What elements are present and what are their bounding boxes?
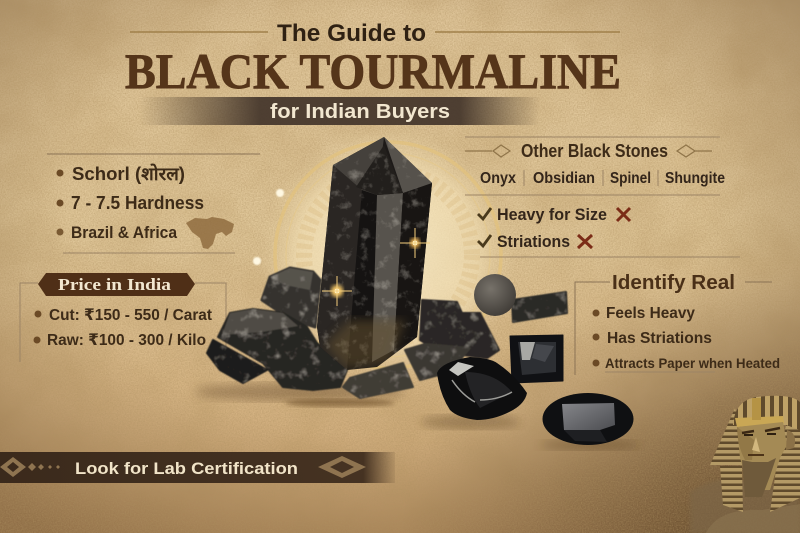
item: has striations: Has Striations — [607, 330, 712, 347]
heading: identify real: Identify Real — [612, 272, 735, 294]
stones list: Obsidian — [533, 170, 595, 187]
heading: other black stones: Other Black Stones — [521, 141, 668, 161]
check: striations: Striations — [497, 232, 570, 251]
pharaoh headdress — [733, 396, 800, 430]
stones list: Spinel — [610, 170, 651, 187]
tourmaline crystal — [317, 137, 432, 370]
stones list: Onyx — [480, 170, 516, 187]
pharaoh beard — [742, 458, 776, 497]
fact: schorl: Schorl (शोरल) — [72, 163, 185, 184]
polished pear gem — [437, 357, 527, 420]
price heading banner: Price in India — [58, 275, 172, 294]
stones list: Shungite — [665, 170, 725, 187]
panel: price in india — [20, 273, 226, 362]
ground shadow and dust — [195, 383, 640, 450]
rough tourmaline rocks — [205, 266, 569, 400]
fact: origin: Brazil & Africa — [71, 223, 177, 242]
fact: hardness: 7 - 7.5 Hardness — [71, 193, 204, 213]
item: attracts paper: Attracts Paper when Heated — [605, 355, 780, 371]
polished oval gem — [542, 393, 634, 445]
price heading banner — [38, 273, 195, 296]
heading: the guide to: The Guide to — [277, 20, 426, 47]
item: feels heavy: Feels Heavy — [606, 305, 695, 322]
stones list — [480, 170, 725, 187]
rounded ball stone — [474, 274, 516, 316]
panel: key facts — [47, 154, 260, 253]
panel: identify real — [575, 272, 780, 375]
check: heavy for size: Heavy for Size — [497, 205, 607, 224]
banner text: Look for Lab Certification — [75, 459, 298, 478]
subtitle banner — [140, 97, 540, 125]
golden glow medallion — [260, 127, 516, 383]
pharaoh figure — [690, 396, 800, 533]
icon: africa map — [186, 217, 234, 249]
icon: left ornament — [0, 457, 60, 477]
heading: black tourmaline: BLACK TOURMALINE — [125, 43, 621, 99]
icon: right ornament — [318, 456, 366, 478]
sparkles — [253, 189, 430, 306]
panel: other black stones — [465, 137, 740, 257]
pharaoh lappets — [710, 408, 800, 512]
polished square gem — [510, 335, 563, 383]
subtitle banner: for Indian Buyers — [270, 101, 450, 123]
price: raw: Raw: ₹100 - 300 / Kilo — [47, 332, 206, 349]
bottom certification banner — [0, 452, 395, 483]
pharaoh face — [737, 422, 787, 490]
check: striations — [478, 232, 592, 251]
price: cut: Cut: ₹150 - 550 / Carat — [49, 307, 213, 324]
